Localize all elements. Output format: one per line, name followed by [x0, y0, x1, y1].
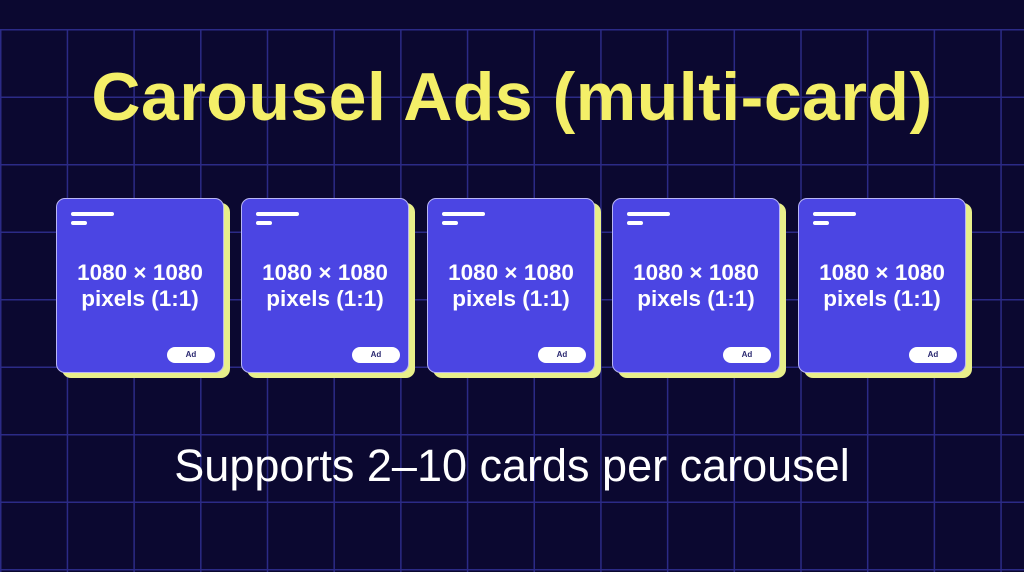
card 5: pixels (1:1) [823, 286, 941, 311]
card 2: 1080 × 1080 [262, 260, 388, 285]
card 5: Ad [928, 350, 938, 359]
card 2: pixels (1:1) [266, 286, 384, 311]
card 4 [612, 198, 786, 378]
card 4: pixels (1:1) [637, 286, 755, 311]
card 5: 1080 × 1080 [819, 260, 945, 285]
card 3: 1080 × 1080 [448, 260, 574, 285]
card 2 [241, 198, 415, 378]
card 1 [56, 198, 230, 378]
subtitle: Supports 2–10 cards per carousel [174, 440, 850, 491]
card 4: Ad [742, 350, 752, 359]
card 3: Ad [557, 350, 567, 359]
card 5 [798, 198, 972, 378]
card 3 [427, 198, 601, 378]
card 2: Ad [371, 350, 381, 359]
card 4: 1080 × 1080 [633, 260, 759, 285]
card 1: pixels (1:1) [81, 286, 199, 311]
title: Carousel Ads (multi-card) [91, 59, 933, 135]
card 3: pixels (1:1) [452, 286, 570, 311]
card 1: 1080 × 1080 [77, 260, 203, 285]
card 1: Ad [186, 350, 196, 359]
